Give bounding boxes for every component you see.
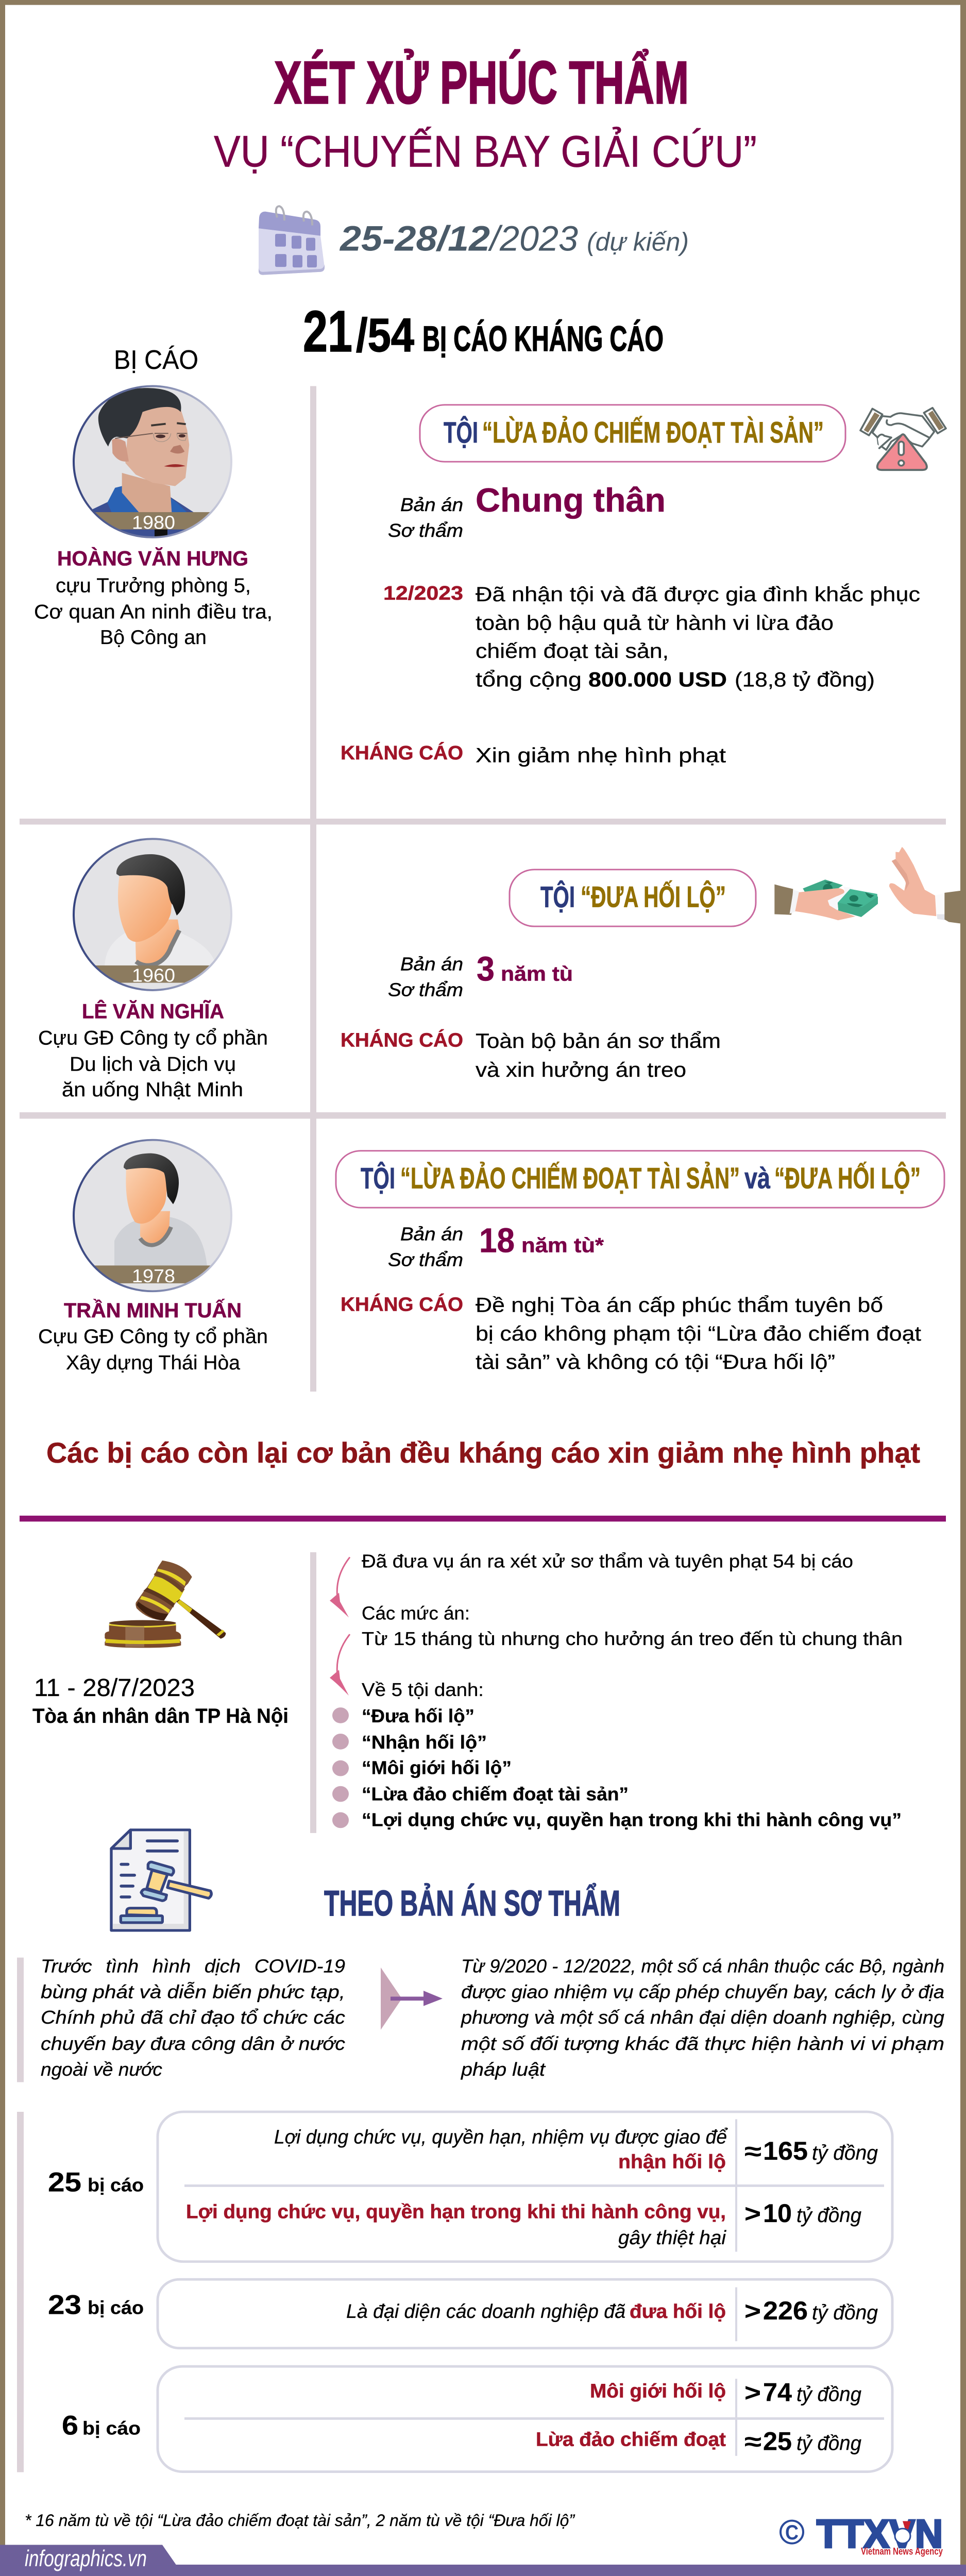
verdict: Sơ thẩm <box>388 520 463 541</box>
December 2023 note: (18,8 tỷ đồng) <box>735 668 875 691</box>
logo: TTXVN: TTXVN <box>817 2512 943 2556</box>
column label: BỊ CÁO <box>114 345 198 375</box>
group: 6 defendants: Môi giới hối lộ <box>590 2380 726 2402</box>
group: 23 defendants: > <box>744 2298 761 2325</box>
verdict: Bản án <box>400 953 463 974</box>
role: Xây dựng Thái Hòa <box>66 1351 241 1374</box>
heading: 21/54 defendants appeal: BỊ CÁO KHÁNG CÁO <box>422 319 664 359</box>
heading: 21/54 defendants appeal: 21 <box>303 298 352 364</box>
role: Du lịch và Dịch vụ <box>70 1053 236 1075</box>
panel dividers <box>20 386 946 1392</box>
role: Bộ Công an <box>100 626 207 649</box>
date: 25-28/12 <box>339 218 490 258</box>
group: 25 defendants: 165 <box>763 2137 808 2165</box>
verdict: năm tù* <box>521 1233 604 1257</box>
December 2023 note: 800.000 USD <box>588 668 727 691</box>
appeal: KHÁNG CÁO <box>341 742 463 764</box>
timeline text: Từ 15 tháng tù nhưng cho hưởng án treo đến tù chung thân <box>362 1628 903 1649</box>
group: 6 defendants: bị cáo <box>82 2417 141 2438</box>
verdict: Sơ thẩm <box>388 979 463 1000</box>
section divider <box>20 1516 946 1521</box>
group: 23 defendants: tỷ đồng <box>812 2301 878 2324</box>
December 2023 note: toàn bộ hậu quả từ hành vi lừa đảo <box>476 611 834 634</box>
group: 6 defendants: tỷ đồng <box>796 2431 861 2454</box>
list of five charges: “Môi giới hối lộ” <box>362 1757 512 1778</box>
verdict: Sơ thẩm <box>388 1249 463 1270</box>
appeal: Xin giảm nhẹ hình phạt <box>476 743 726 767</box>
appeal: Đề nghị Tòa án cấp phúc thẩm tuyên bố <box>476 1293 883 1316</box>
context text left: chuyến bay đưa công dân ở nước <box>41 2033 345 2054</box>
group: 25 defendants: 10 <box>763 2199 792 2228</box>
group: 25 defendants: tỷ đồng <box>796 2204 861 2227</box>
panel: Hoàng Văn Hưng <box>34 386 946 767</box>
date: /2023 <box>488 218 578 258</box>
context text right: một số đối tượng khác đã thực hiện hành vi vi phạm <box>461 2033 944 2054</box>
role <box>38 1325 268 1374</box>
portrait: Hoàng Văn Hưng <box>72 386 237 539</box>
appeal: Toàn bộ bản án sơ thẩm <box>476 1029 721 1053</box>
portrait: Lê Văn Nghĩa: 1960 <box>132 964 175 986</box>
appeal: và xin hưởng án treo <box>476 1058 686 1081</box>
side rule <box>17 2112 24 2472</box>
role: cựu Trưởng phòng 5, <box>56 574 251 597</box>
panel: Lê Văn Nghĩa <box>38 839 961 1101</box>
group: 25 defendants: > <box>744 2200 761 2228</box>
icon: bribe refused <box>774 847 961 924</box>
logo: TTXVN: C <box>785 2521 799 2544</box>
footer: infographics.vn: infographics.vn <box>25 2546 147 2571</box>
icon: calendar <box>259 206 325 275</box>
context text left <box>17 1955 345 2082</box>
title: XÉT XỬ PHÚC THẨM <box>274 49 689 116</box>
context text right <box>461 1955 944 2080</box>
appeal <box>341 742 726 767</box>
date: (dự kiến) <box>587 227 689 256</box>
appeal: bị cáo không phạm tội “Lừa đảo chiếm đoạt <box>476 1322 922 1345</box>
name: TRẦN MINH TUẤN <box>64 1299 242 1322</box>
portrait: Hoàng Văn Hưng: 1980 <box>132 512 175 533</box>
verdict <box>388 950 573 1000</box>
group: 6 defendants: tỷ đồng <box>796 2382 861 2405</box>
group: 25 defendants: ≈ <box>744 2138 761 2165</box>
group: 25 defendants: Lợi dụng chức vụ, quyền hạn, nhiệm vụ được giao để <box>274 2126 728 2148</box>
remaining defendants headline: Các bị cáo còn lại cơ bản đều kháng cáo xin giảm nhẹ hình phạt <box>46 1437 920 1469</box>
group: 25 defendants: Lợi dụng chức vụ, quyền hạn trong khi thi hành công vụ, <box>186 2201 726 2223</box>
verdict: 18 <box>479 1221 515 1260</box>
appeal: KHÁNG CÁO <box>341 1293 463 1315</box>
group: 23 defendants: Là đại diện các doanh nghiệp đã <box>346 2301 625 2323</box>
group: 6 defendants: 25 <box>763 2427 792 2455</box>
role: ăn uống Nhật Minh <box>62 1078 243 1101</box>
context text left: Trước tình hình dịch COVID-19 <box>41 1955 345 1976</box>
context text right: được giao nhiệm vụ cấp phép chuyến bay, cách ly ở địa <box>461 1981 944 2002</box>
group: 6 defendants: ≈ <box>744 2428 761 2455</box>
date <box>339 218 689 258</box>
name: HOÀNG VĂN HƯNG <box>57 547 248 570</box>
footnote: * 16 năm tù về tội “Lừa đảo chiếm đoạt tài sản”, 2 năm tù về tội “Đưa hối lộ” <box>25 2512 575 2530</box>
charge pill: TỘI <box>444 415 478 449</box>
group: 25 defendants: tỷ đồng <box>812 2141 878 2164</box>
group: 25 defendants: bị cáo <box>88 2174 144 2195</box>
group: 6 defendants: Lừa đảo chiếm đoạt <box>536 2429 726 2450</box>
group: 23 defendants: bị cáo <box>88 2297 144 2318</box>
appeal: tài sản” và không có tội “Đưa hối lộ” <box>476 1350 835 1374</box>
verdict: Chung thân <box>476 482 666 519</box>
footer: infographics.vn <box>0 2545 966 2576</box>
subtitle: VỤ “CHUYẾN BAY GIẢI CỨU” <box>214 126 757 176</box>
group: 25 defendants <box>48 2112 892 2262</box>
group: 6 defendants: > <box>744 2379 761 2406</box>
verdict: 3 <box>477 950 495 988</box>
charge pill: TỘI <box>361 1161 395 1195</box>
context text right: pháp luật <box>461 2059 546 2080</box>
December 2023 note <box>383 583 920 691</box>
context text right: Từ 9/2020 - 12/2022, một số cá nhân thuộc các Bộ, ngành <box>461 1955 944 1976</box>
icon: gavel <box>105 1561 226 1648</box>
list of five charges <box>332 1705 902 1830</box>
list of five charges: “Đưa hối lộ” <box>362 1705 474 1726</box>
timeline text: Về 5 tội danh: <box>362 1679 484 1700</box>
timeline text: Các mức án: <box>362 1602 470 1623</box>
appeal <box>341 1029 721 1081</box>
charge pill: “LỪA ĐẢO CHIẾM ĐOẠT TÀI SẢN” <box>400 1161 740 1195</box>
icon: verdict document <box>111 1830 211 1930</box>
charge pill: và <box>744 1162 770 1195</box>
heading: 21/54 defendants appeal: /54 <box>356 309 414 362</box>
charge pill <box>510 870 756 926</box>
group: 25 defendants: nhận hối lộ <box>618 2151 726 2173</box>
group: 23 defendants: 23 <box>48 2290 81 2320</box>
context text left: Chính phủ đã chỉ đạo tổ chức các <box>41 2007 345 2028</box>
charge pill: TỘI <box>540 880 575 913</box>
panel: Trần Minh Tuấn <box>38 1140 944 1374</box>
role <box>34 574 273 649</box>
appeal <box>341 1293 922 1374</box>
verdict <box>388 482 666 541</box>
portrait: Lê Văn Nghĩa <box>72 839 237 990</box>
role: Cựu GĐ Công ty cổ phần <box>38 1026 268 1049</box>
group: 6 defendants: 74 <box>763 2378 792 2406</box>
context text left: ngoài về nước <box>41 2059 162 2080</box>
appeal: KHÁNG CÁO <box>341 1029 463 1051</box>
role: Cơ quan An ninh điều tra, <box>34 600 273 623</box>
name: LÊ VĂN NGHĨA <box>82 999 224 1023</box>
list of five charges: “Lừa đảo chiếm đoạt tài sản” <box>362 1783 629 1804</box>
verdict: năm tù <box>501 962 573 985</box>
section heading: THEO BẢN ÁN SƠ THẨM <box>324 1883 620 1924</box>
timeline text <box>362 1550 903 1700</box>
list of five charges: “Nhận hối lộ” <box>362 1731 487 1753</box>
verdict <box>388 1221 604 1270</box>
group: 23 defendants: 226 <box>763 2296 808 2325</box>
role <box>38 1026 268 1101</box>
first-instance trial date and court: Tòa án nhân dân TP Hà Nội <box>32 1704 289 1727</box>
timeline arrows <box>330 1557 350 1696</box>
group: 23 defendants: đưa hối lộ <box>630 2301 726 2323</box>
group: 25 defendants: gây thiệt hại <box>618 2227 726 2249</box>
heading: 21/54 defendants appeal <box>303 298 664 364</box>
December 2023 note: tổng cộng <box>476 668 582 691</box>
group: 25 defendants: 25 <box>48 2167 81 2197</box>
December 2023 note: chiếm đoạt tài sản, <box>476 639 669 663</box>
charge pill: “ĐƯA HỐI LỘ” <box>581 880 726 913</box>
portrait: Trần Minh Tuấn <box>72 1140 237 1291</box>
group: 23 defendants <box>48 2279 892 2348</box>
icon: handshake warning <box>860 408 946 470</box>
first-instance trial date and court <box>32 1674 289 1727</box>
portrait: Trần Minh Tuấn: 1978 <box>132 1265 175 1286</box>
arrow: cause to consequence <box>381 1968 443 2030</box>
December 2023 note: Đã nhận tội và đã được gia đình khắc phục <box>476 583 920 606</box>
timeline text: Đã đưa vụ án ra xét xử sơ thẩm và tuyên phạt 54 bị cáo <box>362 1550 853 1571</box>
list of five charges: “Lợi dụng chức vụ, quyền hạn trong khi thi hành công vụ” <box>362 1809 902 1830</box>
verdict: Bản án <box>400 1223 463 1244</box>
charge pill <box>420 405 845 462</box>
context text right: phương và một số cá nhân đại diện doanh nghiệp, cùng <box>461 2007 944 2028</box>
charge pill <box>336 1151 944 1208</box>
December 2023 note: 12/2023 <box>383 583 463 604</box>
role: Cựu GĐ Công ty cổ phần <box>38 1325 268 1348</box>
group: 6 defendants <box>62 2366 892 2472</box>
verdict: Bản án <box>400 494 463 515</box>
timeline rule <box>310 1552 316 1833</box>
context text left: bùng phát và diễn biến phức tạp, <box>41 1981 345 2002</box>
first-instance trial date and court: 11 - 28/7/2023 <box>34 1674 195 1702</box>
group: 6 defendants: 6 <box>62 2411 78 2441</box>
